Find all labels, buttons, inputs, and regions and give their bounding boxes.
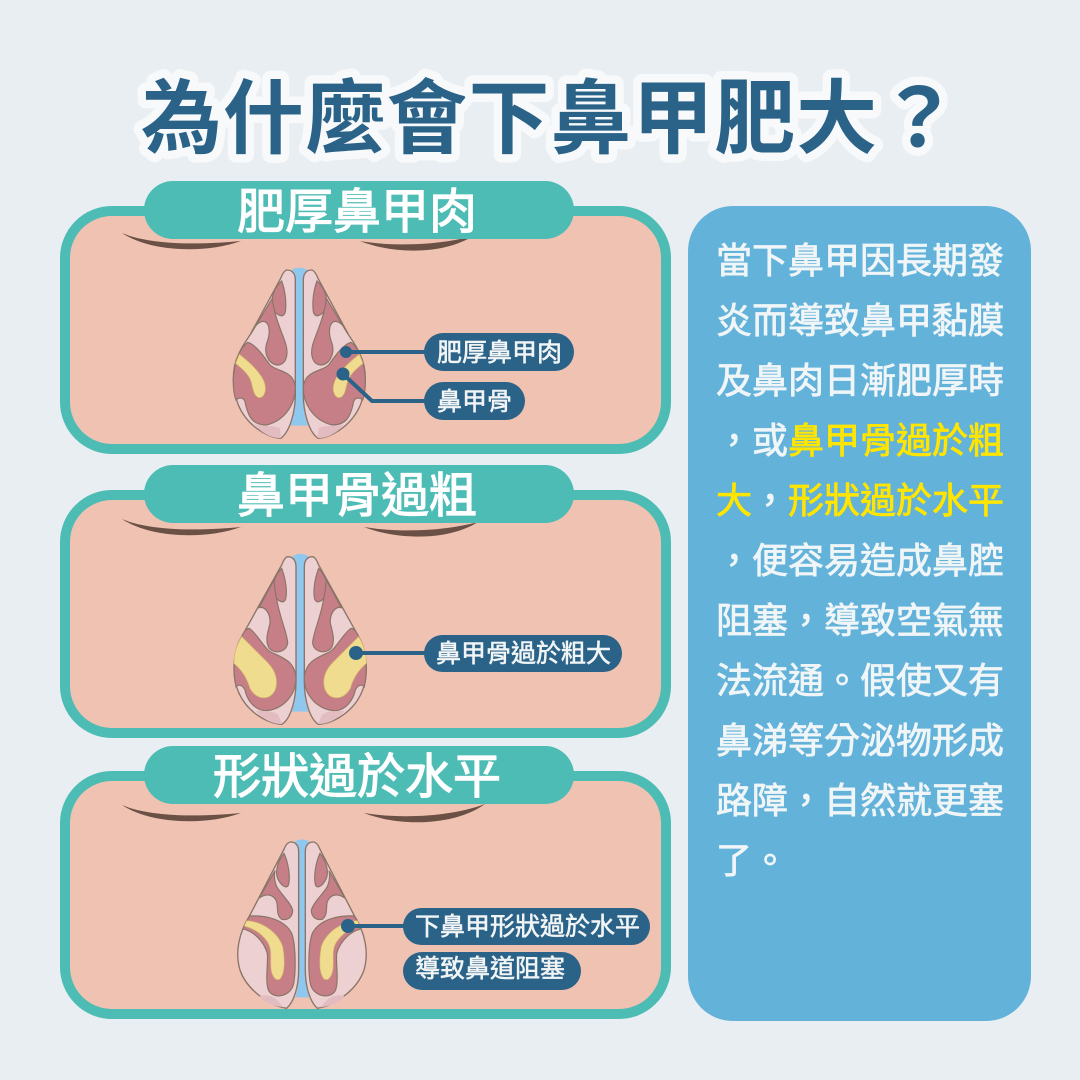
explanation text: 當下鼻甲因長期發 [716, 240, 1004, 281]
explanation text [716, 240, 1004, 881]
nose diagram 2 [234, 554, 366, 724]
panel background [688, 206, 1031, 1021]
header 1 [144, 181, 574, 239]
header 2: 鼻甲骨過粗 [237, 470, 477, 523]
eyes 3 [122, 804, 485, 822]
title: 為什麼會下鼻甲肥大？ [141, 75, 959, 165]
explanation text: 了。 [716, 840, 788, 881]
callout: mucosa: 肥厚鼻甲肉 [437, 339, 562, 367]
header 3 [144, 746, 574, 804]
panel frame 1 [65, 211, 666, 449]
explanation text: 路障，自然就更塞 [716, 780, 1004, 821]
callout: horizontal shape blocks the passage [341, 908, 650, 990]
explanation text: 及鼻肉日漸肥厚時 [716, 360, 1004, 401]
explanation text: ，或鼻甲骨過於粗 [716, 420, 1004, 461]
panel: explanation [688, 206, 1031, 1021]
header 3: 形狀過於水平 [213, 751, 501, 804]
callout: enlarged bone [349, 635, 622, 672]
explanation text: 阻塞，導致空氣無 [716, 600, 1004, 641]
explanation text: 大，形狀過於水平 [716, 480, 1004, 521]
explanation text: 鼻涕等分泌物形成 [716, 720, 1004, 761]
callout: enlarged bone: 鼻甲骨過於粗大 [436, 640, 611, 668]
panel: oversized turbinate bone [65, 465, 666, 733]
explanation text: 法流通。假使又有 [716, 660, 1004, 701]
callout: horizontal shape blocks the passage: 下鼻甲形狀過於水平 [415, 913, 640, 941]
explanation text: 炎而導致鼻甲黏膜 [716, 300, 1004, 341]
callout: horizontal shape blocks the passage: 導致鼻道阻塞 [415, 955, 565, 983]
callout: turbinate bone [336, 368, 525, 420]
panel frame 3 [65, 776, 666, 1014]
nose diagram 3 [238, 839, 366, 1008]
header 1: 肥厚鼻甲肉 [237, 186, 477, 239]
header 2 [144, 465, 574, 523]
panel: thick turbinate mucosa [65, 181, 666, 449]
nose diagram 1 [233, 268, 365, 438]
callout: turbinate bone: 鼻甲骨 [437, 388, 512, 416]
panel: overly horizontal shape [65, 746, 666, 1014]
eyes 1 [122, 233, 473, 251]
panel frame 2 [65, 495, 666, 733]
eyes 2 [122, 519, 478, 537]
callout: mucosa [340, 333, 574, 371]
explanation text: ，便容易造成鼻腔 [716, 540, 1004, 581]
